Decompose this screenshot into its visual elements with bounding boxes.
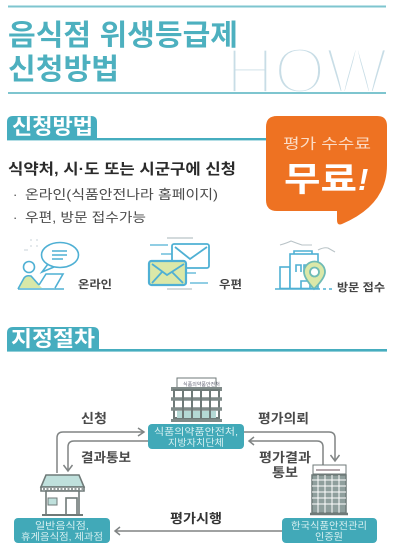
callout: free evaluation fee: 평가 수수료 (283, 136, 371, 153)
label: online: 온라인 (78, 278, 112, 291)
box: food and drug ministry (148, 424, 244, 449)
box: HACCP certification institute (282, 518, 377, 543)
flow labels (81, 411, 311, 526)
box: HACCP certification institute: 인증원 (315, 532, 343, 543)
icon: online (18, 240, 78, 289)
heading: 지정절차 (7, 327, 387, 352)
flow labels: 신청 (81, 411, 107, 426)
application text block: · (13, 187, 17, 202)
icon: government building (171, 378, 222, 422)
application text block: 우편, 방문 접수가능 (25, 210, 146, 225)
arrow: application (57, 428, 144, 473)
icon: visit (275, 241, 335, 289)
application text block (8, 161, 236, 225)
application text block: 온라인(식품안전나라 홈페이지) (25, 187, 218, 202)
box: HACCP certification institute: 한국식품안전관리 (291, 521, 367, 532)
icon: mail (149, 238, 209, 289)
flow labels: 평가결과 (259, 450, 311, 465)
label: visit: 방문 접수 (337, 281, 385, 294)
callout: free evaluation fee: ! (358, 162, 368, 197)
arrow: evaluation result (249, 437, 323, 465)
icon: certification tower (310, 465, 348, 514)
label: mail: 우편 (219, 278, 242, 291)
arrow: evaluation request (244, 432, 340, 461)
heading: 신청방법 (7, 116, 270, 140)
header rules (8, 6, 386, 94)
arrow: evaluation performed (115, 527, 282, 535)
title: 신청방법 (8, 53, 119, 86)
heading: 신청방법: 신청방법 (12, 116, 93, 139)
callout: free evaluation fee (266, 116, 387, 224)
application text block: · (13, 210, 17, 225)
background word: HOW: HOW (226, 34, 389, 107)
application text block: 식약처, 시·도 또는 시군구에 신청 (8, 161, 236, 178)
icon: government building: 식품의약품안전처 (183, 381, 220, 388)
icon: restaurant store (41, 475, 84, 515)
arrow: result notice (64, 441, 148, 471)
box: restaurants: 일반음식점, (35, 520, 89, 532)
callout: free evaluation fee: 무료 (284, 161, 357, 199)
flow labels: 평가의뢰 (258, 411, 309, 426)
flow labels: 통보 (272, 465, 298, 480)
box: restaurants (14, 518, 110, 543)
box: restaurants: 휴게음식점, 제과점 (21, 531, 103, 543)
title: 음식점 위생등급제 (8, 19, 238, 52)
flow labels: 결과통보 (81, 450, 131, 465)
heading: 지정절차: 지정절차 (11, 328, 95, 351)
box: food and drug ministry: 지방자치단체 (168, 437, 224, 449)
title (8, 19, 238, 86)
box: food and drug ministry: 식품의약품안전처, (154, 426, 238, 438)
flow labels: 평가시행 (170, 511, 222, 526)
